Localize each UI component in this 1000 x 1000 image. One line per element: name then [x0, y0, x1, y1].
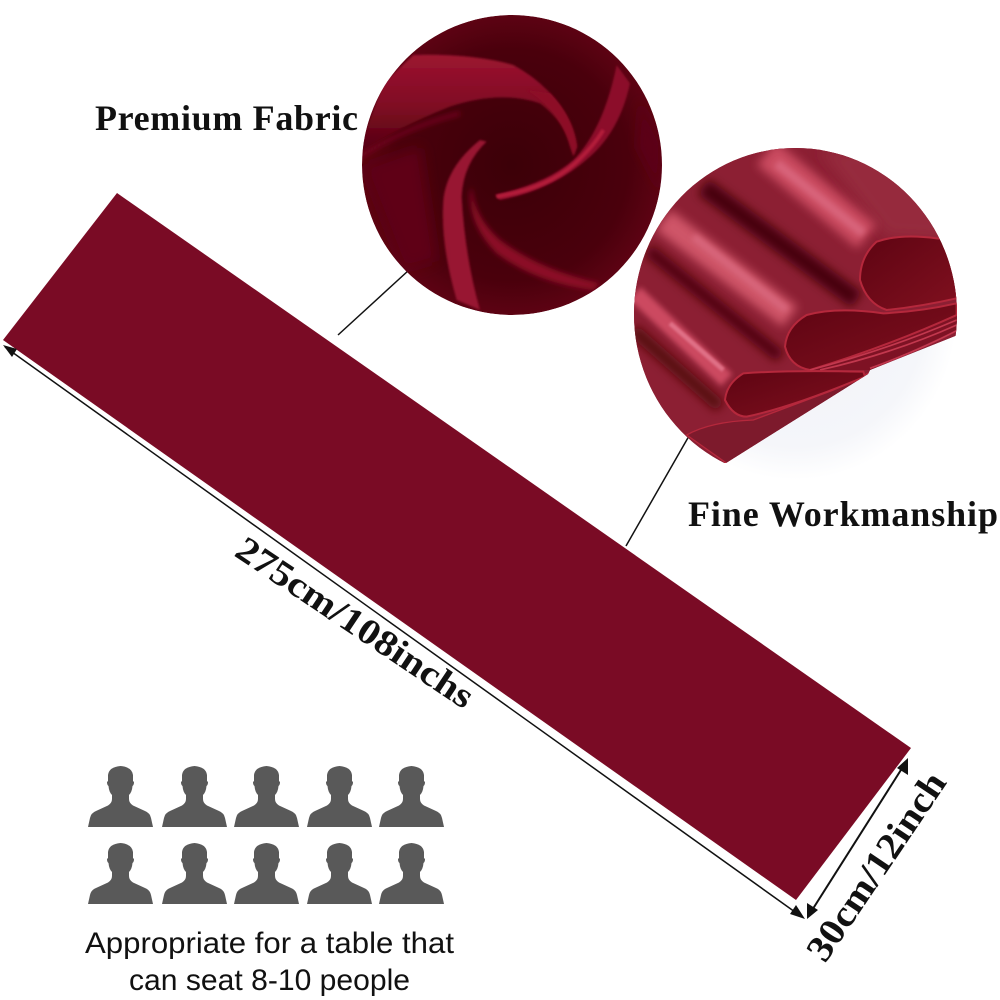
width arrow [807, 758, 908, 919]
inner fold: lower loop [725, 371, 865, 417]
heading: fine workmanship: Fine Workmanship [688, 494, 998, 534]
top row of people [88, 766, 444, 827]
satin folds [634, 148, 957, 463]
bottom flap [687, 373, 868, 463]
hem stitching [810, 320, 957, 370]
circle photo: satin folds workmanship [634, 148, 957, 463]
width label: 30cm/12inch [798, 764, 955, 969]
people icons: seating [88, 766, 444, 904]
bottom row of people [88, 843, 444, 904]
connector line: fine workmanship [626, 436, 689, 546]
stacked hem [810, 303, 957, 370]
connector line: premium fabric [338, 270, 409, 335]
length label: 275cm/108inchs [229, 528, 482, 716]
soft shadow under fabric [634, 148, 957, 480]
seating caption: Appropriate for a table that [85, 927, 455, 960]
inner fold: middle loop [785, 303, 957, 370]
inner fold: top loop [860, 236, 957, 310]
length arrow [3, 345, 805, 919]
heading: premium fabric: Premium Fabric [95, 98, 358, 138]
table runner panel [3, 193, 911, 900]
seating caption: can seat 8-10 people [129, 964, 410, 997]
seating caption [85, 927, 455, 997]
circle photo: premium fabric swirl [357, 15, 662, 315]
